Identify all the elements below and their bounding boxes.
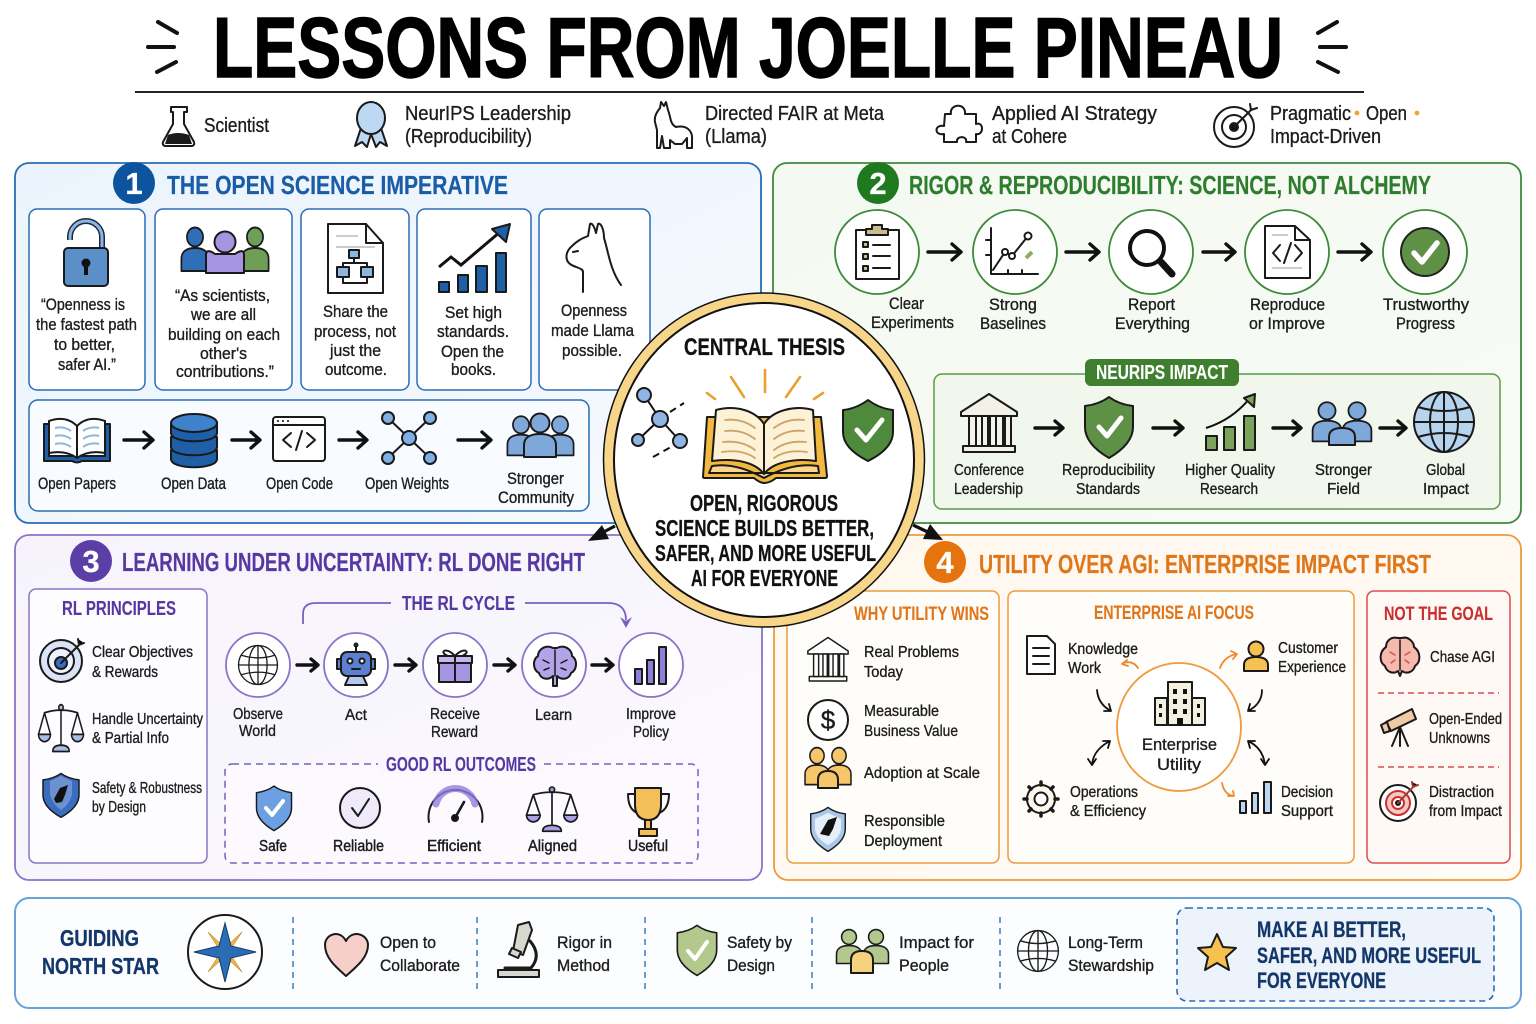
labels: Useful bbox=[628, 838, 668, 855]
icon: people bbox=[805, 748, 851, 788]
labels: Stronger bbox=[1315, 462, 1373, 479]
text: Openness bbox=[561, 301, 627, 320]
icon: shield bbox=[1085, 397, 1133, 458]
text: Open to bbox=[380, 933, 436, 952]
rl principles box bbox=[29, 589, 207, 863]
icon: telescope bbox=[1381, 709, 1416, 746]
icon: llama outline bbox=[655, 102, 692, 148]
icon: line chart bbox=[986, 228, 1038, 274]
cycle arrow bbox=[303, 603, 632, 628]
panel 1: open science bbox=[15, 162, 761, 523]
label bbox=[430, 706, 480, 741]
labels bbox=[954, 462, 1470, 498]
icon: dollar: $ bbox=[821, 705, 836, 735]
callout bbox=[1177, 908, 1494, 1001]
label: World bbox=[239, 723, 276, 740]
text: Impact for bbox=[899, 933, 974, 952]
step: act bbox=[324, 633, 388, 724]
text: made Llama bbox=[551, 321, 634, 340]
icon: target bbox=[1214, 104, 1257, 147]
text: NeurIPS Leadership bbox=[405, 103, 571, 148]
label: or Improve bbox=[1249, 314, 1325, 333]
card: high standards bbox=[417, 209, 531, 390]
icon: robot bbox=[337, 644, 375, 685]
icon: globe bbox=[1018, 931, 1058, 971]
text: NeurIPS Leadership: NeurIPS Leadership bbox=[405, 103, 571, 125]
text: Set high bbox=[445, 303, 502, 322]
icon: target bbox=[40, 639, 84, 682]
text: by Design bbox=[92, 799, 146, 816]
central thesis bbox=[588, 293, 943, 627]
heading: NORTH STAR bbox=[42, 953, 159, 979]
text bbox=[864, 703, 958, 740]
text: NeurIPS Leadership: (Reproducibility) bbox=[405, 126, 532, 148]
text: & Rewards bbox=[92, 664, 158, 681]
icon: database bbox=[171, 414, 217, 467]
heading: GUIDING bbox=[60, 925, 139, 951]
step: observe bbox=[226, 633, 290, 740]
text bbox=[437, 303, 509, 379]
icon: globe bbox=[238, 646, 278, 684]
step: learn bbox=[522, 633, 586, 724]
text: Collaborate bbox=[380, 956, 460, 975]
hub bbox=[1117, 663, 1241, 791]
icon: document bbox=[1027, 636, 1055, 674]
text: & Partial Info bbox=[92, 730, 169, 747]
icon: three people bbox=[181, 228, 269, 273]
labels: Open Data bbox=[161, 474, 226, 493]
label bbox=[1249, 295, 1325, 333]
text bbox=[1257, 917, 1481, 993]
text: Work bbox=[1068, 660, 1102, 677]
text bbox=[1068, 933, 1154, 975]
text: Distraction bbox=[1429, 784, 1494, 801]
text bbox=[92, 711, 203, 747]
arrow bbox=[928, 244, 961, 260]
text: Operations bbox=[1070, 784, 1138, 801]
text: to better, bbox=[54, 335, 115, 354]
badge 4: 4 bbox=[936, 545, 954, 580]
text: Applied AI Strategy: at Cohere bbox=[992, 126, 1067, 148]
text: Applied AI Strategy: Applied AI Strategy bbox=[992, 103, 1157, 125]
text: Pragmatic Open Impact-Driven: Open bbox=[1366, 103, 1407, 125]
text: from Impact bbox=[1429, 803, 1502, 820]
text: Experience bbox=[1278, 659, 1346, 676]
icon: people bbox=[1313, 402, 1371, 445]
icon: bars bbox=[635, 647, 666, 684]
label: Reward bbox=[431, 724, 478, 741]
icon: dollar bbox=[808, 700, 848, 740]
panel 2: rigor bbox=[773, 162, 1521, 523]
labels: Open Weights bbox=[365, 474, 449, 493]
guiding north star bar bbox=[15, 898, 1521, 1008]
arrow bbox=[1380, 421, 1406, 435]
card: scientists quote bbox=[155, 209, 292, 390]
text bbox=[557, 933, 612, 975]
labels: Efficient bbox=[427, 838, 482, 855]
text bbox=[1429, 784, 1502, 820]
step: reproduce or improve bbox=[1245, 210, 1329, 333]
labels: Global bbox=[1426, 462, 1465, 479]
good outcomes box bbox=[225, 754, 698, 863]
tag: NEURIPS IMPACT bbox=[1096, 362, 1228, 384]
icon: network bbox=[382, 412, 436, 464]
icon: institution bbox=[961, 394, 1017, 452]
text: Design bbox=[727, 956, 775, 975]
text bbox=[36, 295, 137, 374]
not the goal box bbox=[1367, 591, 1510, 863]
labels bbox=[259, 838, 668, 855]
text: other's bbox=[200, 344, 247, 363]
text bbox=[864, 813, 945, 850]
labels: Safe bbox=[259, 838, 287, 855]
label bbox=[871, 294, 954, 332]
text: Pragmatic Open Impact-Driven: Pragmatic bbox=[1270, 103, 1351, 125]
text: thesis bbox=[655, 490, 876, 591]
text: Deployment bbox=[864, 833, 943, 850]
arrow bbox=[395, 659, 416, 671]
label: Baselines bbox=[980, 314, 1046, 333]
icon: reliable check bbox=[340, 788, 380, 828]
labels: Field bbox=[1327, 481, 1360, 498]
arrow bbox=[1338, 244, 1371, 260]
arrow bbox=[592, 659, 613, 671]
label: Receive bbox=[430, 706, 480, 723]
label: Progress bbox=[1396, 314, 1455, 333]
arrow bbox=[1066, 244, 1099, 260]
text: & Efficiency bbox=[1070, 803, 1146, 820]
text: “As scientists, bbox=[175, 286, 270, 305]
step: clear experiments bbox=[835, 210, 954, 332]
text: outcome. bbox=[325, 360, 387, 379]
text: building on each bbox=[168, 325, 280, 344]
tag bbox=[1085, 359, 1239, 386]
text: process, not bbox=[314, 322, 396, 341]
text: Applied AI Strategy bbox=[992, 103, 1157, 148]
icon: customer bbox=[1244, 642, 1268, 671]
heading bbox=[42, 925, 159, 979]
text: Today bbox=[864, 664, 903, 681]
step: reward bbox=[423, 633, 487, 741]
icon: trophy bbox=[628, 788, 669, 836]
icon: document flowchart bbox=[328, 224, 383, 293]
enterprise focus box bbox=[1008, 591, 1354, 863]
icon: magnifier bbox=[1130, 231, 1172, 274]
text bbox=[1281, 784, 1334, 820]
labels: Community bbox=[498, 488, 574, 507]
label: Trustworthy bbox=[1383, 295, 1469, 314]
icon: puzzle bbox=[936, 106, 982, 142]
text: Chase AGI bbox=[1430, 649, 1495, 666]
arrow bbox=[1203, 244, 1235, 260]
text: Safety & Robustness bbox=[92, 780, 202, 797]
icon: rising chart bbox=[439, 224, 510, 292]
text: Scientist: Scientist bbox=[204, 115, 269, 137]
heading: THE OPEN SCIENCE IMPERATIVE bbox=[167, 170, 508, 200]
text bbox=[1142, 735, 1217, 774]
text bbox=[551, 301, 634, 360]
text: Safety by bbox=[727, 933, 792, 952]
icon: clipboard bbox=[856, 225, 899, 279]
icon: gauge bbox=[428, 788, 482, 822]
text: thesis: OPEN, RIGOROUS bbox=[690, 490, 838, 516]
text: thesis: AI FOR EVERYONE bbox=[691, 565, 838, 591]
text: Directed FAIR: (Llama) bbox=[705, 126, 767, 148]
text: Decision bbox=[1281, 784, 1333, 801]
labels: Higher Quality bbox=[1185, 462, 1275, 479]
open flow bbox=[29, 400, 589, 511]
divider bbox=[1378, 766, 1499, 768]
badge 3: 3 bbox=[82, 544, 100, 579]
card: llama bbox=[539, 209, 650, 390]
icon: responsible shield bbox=[811, 807, 845, 851]
label: Policy bbox=[633, 724, 669, 741]
label: Everything bbox=[1115, 314, 1190, 333]
text: Clear Objectives bbox=[92, 644, 193, 661]
neurips impact box bbox=[934, 359, 1500, 509]
text: Directed FAIR bbox=[705, 103, 885, 148]
label bbox=[626, 706, 676, 741]
title accent left bbox=[148, 22, 177, 72]
icon: star bbox=[1198, 934, 1236, 970]
badge 2 bbox=[857, 162, 899, 204]
text: Open the bbox=[441, 342, 504, 361]
text: thesis: SAFER, AND MORE USEFUL bbox=[655, 540, 876, 566]
icon: shield bbox=[43, 773, 79, 817]
why utility wins box bbox=[787, 591, 999, 863]
icon: rays bbox=[707, 370, 823, 399]
icon: safe shield bbox=[256, 786, 292, 831]
text bbox=[1278, 640, 1346, 676]
icon: ribbon bbox=[355, 102, 387, 147]
arrow bbox=[124, 432, 153, 448]
icon: scales bbox=[526, 787, 578, 831]
step: report everything bbox=[1109, 210, 1193, 333]
labels: Impact bbox=[1423, 481, 1470, 498]
profile strip bbox=[163, 102, 1419, 148]
heading: WHY UTILITY WINS bbox=[854, 604, 989, 625]
icon: shield bbox=[843, 400, 893, 461]
arrow bbox=[458, 432, 491, 448]
labels bbox=[38, 469, 574, 507]
icon: bars bbox=[1240, 782, 1271, 813]
icon: compass bbox=[188, 915, 262, 989]
text bbox=[380, 933, 460, 975]
icon: gear bbox=[1024, 782, 1058, 816]
heading: CENTRAL THESIS bbox=[684, 334, 845, 361]
label: Reproduce bbox=[1250, 295, 1325, 314]
text bbox=[314, 302, 396, 379]
label: Experiments bbox=[871, 313, 954, 332]
text bbox=[1429, 711, 1502, 747]
labels: Standards bbox=[1076, 481, 1140, 498]
icon: quality chart bbox=[1206, 394, 1255, 450]
text: Unknowns bbox=[1429, 730, 1490, 747]
text bbox=[92, 644, 193, 681]
card: openness quote bbox=[29, 209, 145, 390]
labels: Aligned bbox=[528, 838, 577, 855]
text: safer AI.” bbox=[58, 355, 116, 374]
text: MAKE AI BETTER, bbox=[1257, 917, 1406, 942]
labels: Research bbox=[1200, 481, 1258, 498]
heading: NOT THE GOAL bbox=[1384, 604, 1493, 625]
text: Stewardship bbox=[1068, 956, 1154, 975]
arrow to panel 3 bbox=[588, 525, 615, 541]
text: Handle Uncertainty bbox=[92, 711, 203, 728]
icon: bank bbox=[808, 638, 848, 681]
text: Adoption at Scale bbox=[864, 765, 980, 782]
text: books. bbox=[451, 360, 496, 379]
panel 3: RL bbox=[15, 535, 762, 880]
panel 4: utility bbox=[774, 535, 1521, 880]
text: Rigor in bbox=[557, 933, 612, 952]
text bbox=[168, 286, 280, 381]
text: Directed FAIR: Directed FAIR at Meta bbox=[705, 103, 885, 125]
icon: brain bbox=[1381, 638, 1419, 676]
label: Report bbox=[1128, 295, 1175, 314]
labels: Open Code bbox=[266, 474, 333, 493]
icon: people bbox=[837, 930, 888, 973]
text: Responsible bbox=[864, 813, 945, 830]
text: Pragmatic Open Impact-Driven bbox=[1270, 103, 1419, 148]
text bbox=[864, 644, 959, 681]
heading: LEARNING UNDER UNCERTAINTY: RL DONE RIGHT bbox=[122, 547, 585, 577]
icon: heart bbox=[325, 934, 368, 976]
text: Support bbox=[1281, 803, 1334, 820]
labels: Reproducibility bbox=[1062, 462, 1155, 479]
label: Improve bbox=[626, 706, 676, 723]
text: Business Value bbox=[864, 723, 958, 740]
text: possible. bbox=[562, 341, 622, 360]
text: Open-Ended bbox=[1429, 711, 1502, 728]
icon: lock bbox=[64, 221, 108, 286]
label: Learn bbox=[535, 707, 572, 724]
icon: open book bbox=[703, 408, 827, 483]
arrow bbox=[1273, 421, 1301, 435]
text: Method bbox=[557, 956, 610, 975]
badge 1 bbox=[113, 162, 155, 204]
text: just the bbox=[329, 341, 381, 360]
card: share the process bbox=[301, 209, 409, 390]
text bbox=[92, 780, 202, 816]
step: improve bbox=[619, 633, 683, 741]
heading: ENTERPRISE AI FOCUS bbox=[1094, 603, 1254, 624]
text: FOR EVERYONE bbox=[1257, 968, 1386, 993]
text: Knowledge bbox=[1068, 641, 1138, 658]
label: Strong bbox=[989, 295, 1037, 314]
rl cycle heading: THE RL CYCLE bbox=[402, 593, 515, 615]
text: Measurable bbox=[864, 703, 939, 720]
text bbox=[1068, 641, 1138, 677]
icon: flask bbox=[163, 107, 194, 146]
text: “Openness is bbox=[41, 295, 125, 314]
text: Enterprise bbox=[1142, 735, 1217, 754]
badge 4 bbox=[924, 541, 966, 583]
icon: brain bbox=[534, 647, 576, 686]
arrow bbox=[1035, 421, 1063, 435]
text bbox=[727, 933, 792, 975]
heading: RL PRINCIPLES bbox=[62, 598, 176, 620]
text: the fastest path bbox=[36, 315, 137, 334]
text: Utility bbox=[1157, 755, 1202, 774]
icon: network bbox=[632, 388, 687, 457]
icon: code doc bbox=[1265, 226, 1310, 278]
text: People bbox=[899, 956, 949, 975]
label bbox=[1383, 295, 1469, 333]
icon: shield bbox=[677, 925, 717, 975]
text: standards. bbox=[437, 322, 509, 341]
label: Clear bbox=[889, 294, 924, 313]
arrow bbox=[297, 659, 318, 671]
text: Share the bbox=[323, 302, 388, 321]
icon: code window bbox=[273, 417, 325, 461]
icon: open book bbox=[44, 419, 110, 462]
heading: GOOD RL OUTCOMES bbox=[386, 754, 536, 776]
title accent right bbox=[1318, 22, 1346, 72]
icon: community bbox=[507, 414, 574, 457]
labels: Leadership bbox=[954, 481, 1023, 498]
label bbox=[1115, 295, 1190, 333]
icon: buildings bbox=[1155, 682, 1205, 725]
text: Real Problems bbox=[864, 644, 959, 661]
icon: gift bbox=[438, 651, 472, 682]
icon: red target bbox=[1380, 782, 1418, 821]
icon: scales bbox=[38, 705, 84, 752]
step: trustworthy progress bbox=[1383, 210, 1469, 333]
arrow bbox=[1153, 421, 1183, 435]
labels: Stronger bbox=[507, 469, 564, 488]
text bbox=[899, 933, 974, 975]
labels: Open Papers bbox=[38, 474, 116, 493]
step: strong baselines bbox=[973, 210, 1057, 333]
labels: Conference bbox=[954, 462, 1024, 479]
icon: llama bbox=[566, 224, 621, 292]
arrow bbox=[494, 659, 515, 671]
text: Customer bbox=[1278, 640, 1339, 657]
label: Act bbox=[345, 707, 368, 724]
text bbox=[1070, 784, 1146, 820]
badge 1: 1 bbox=[125, 166, 143, 201]
icon: microscope bbox=[498, 922, 539, 977]
arrow bbox=[339, 432, 367, 448]
badge 2: 2 bbox=[869, 166, 887, 201]
icon: globe bbox=[1414, 392, 1474, 452]
label bbox=[980, 295, 1046, 333]
text: thesis: SCIENCE BUILDS BETTER, bbox=[655, 515, 874, 541]
text: contributions.” bbox=[176, 362, 274, 381]
arrow bbox=[232, 432, 260, 448]
label bbox=[233, 706, 283, 740]
badge 3 bbox=[70, 540, 112, 582]
labels: Reliable bbox=[333, 838, 384, 855]
icon: check bbox=[1401, 228, 1449, 276]
text: Pragmatic Open Impact-Driven: Impact-Driven bbox=[1270, 126, 1381, 148]
hub arrows bbox=[1088, 651, 1269, 796]
text: Long-Term bbox=[1068, 933, 1143, 952]
arrow to panel 4 bbox=[913, 524, 943, 540]
text: we are all bbox=[190, 305, 256, 324]
divider bbox=[1378, 692, 1499, 694]
label: Observe bbox=[233, 706, 283, 723]
